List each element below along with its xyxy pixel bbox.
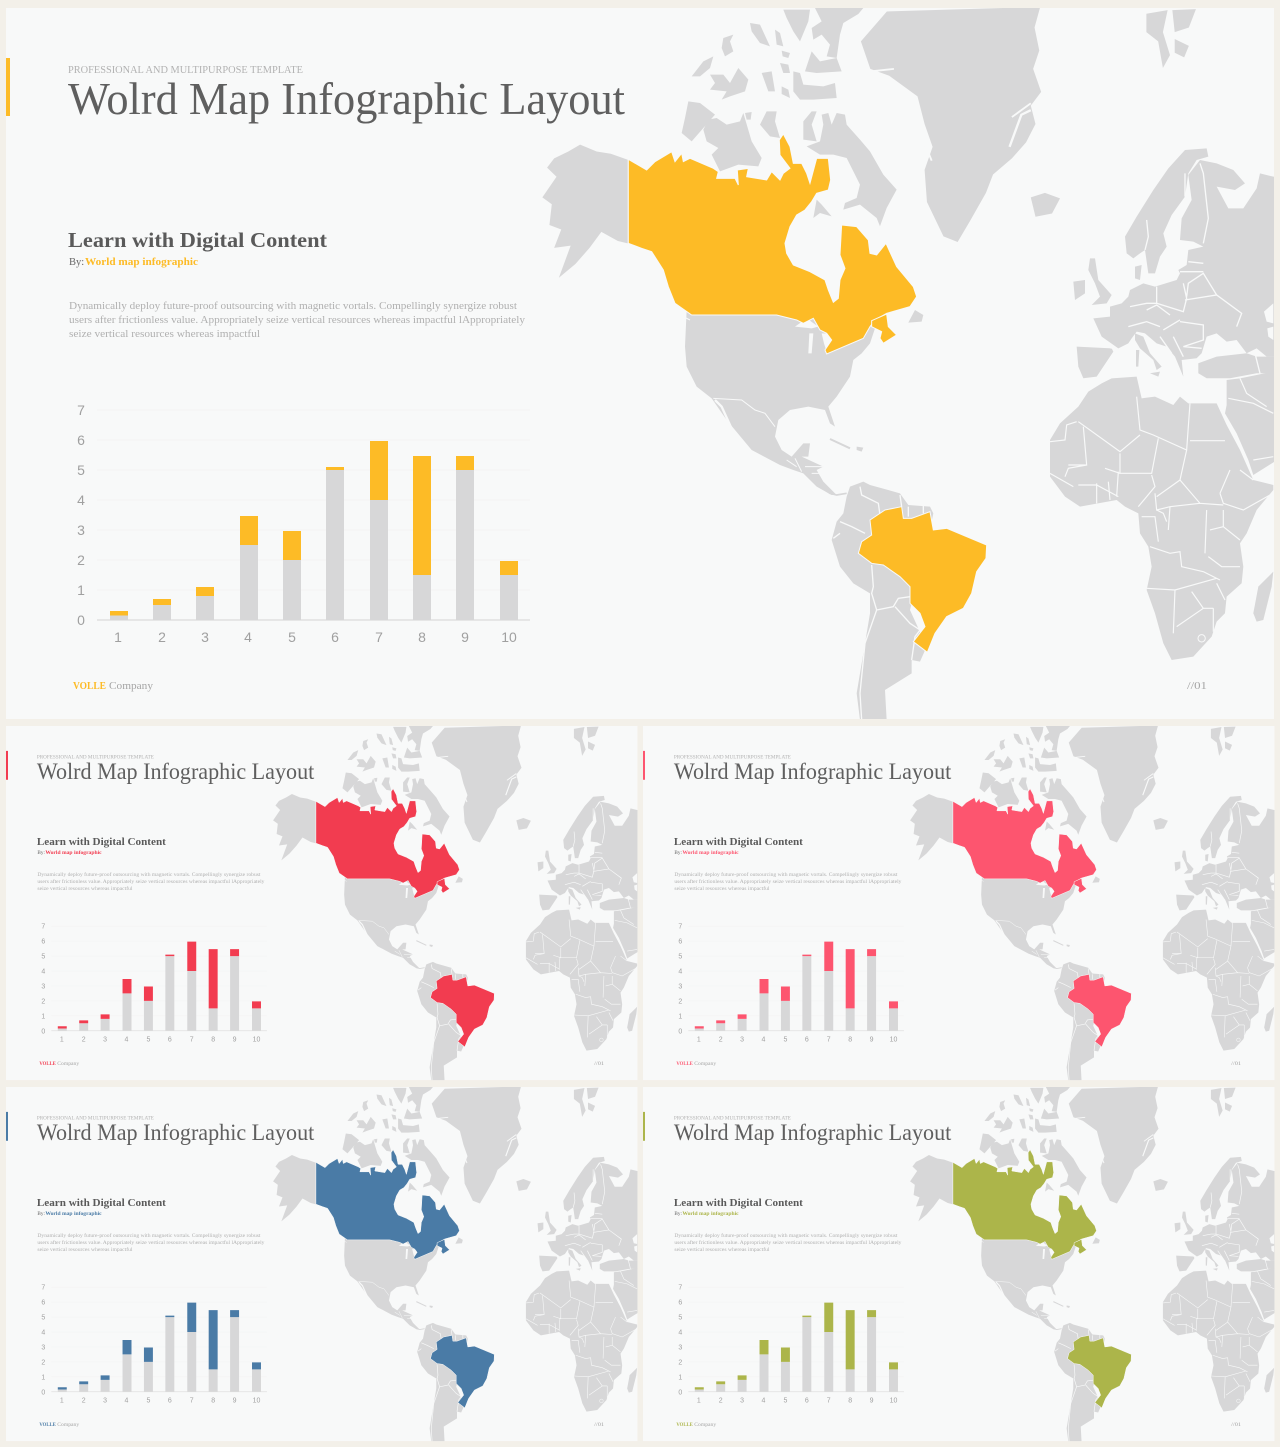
stacked bar chart: 4	[125, 1037, 129, 1044]
stacked bar chart: 7	[375, 629, 383, 645]
stacked bar chart: 9	[870, 1037, 874, 1044]
world map	[273, 725, 644, 1081]
page number: //01	[594, 1422, 604, 1428]
stacked bar chart: 5	[288, 629, 296, 645]
stacked bar chart: 4	[678, 1330, 682, 1337]
body text	[69, 300, 526, 340]
accent bar	[643, 1112, 645, 1141]
stacked bar chart: 8	[211, 1037, 215, 1044]
stacked bar chart: 5	[146, 1037, 150, 1044]
eyebrow label: PROFESSIONAL AND MULTIPURPOSE TEMPLATE	[37, 1115, 154, 1121]
title: Wolrd Map Infographic Layout	[68, 73, 625, 124]
stacked bar chart: 0	[678, 1389, 682, 1396]
stacked bar chart: 4	[762, 1398, 766, 1405]
footer brand: Company	[57, 1061, 79, 1067]
accent bar	[6, 58, 10, 116]
body text: Dynamically deploy future-proof outsourcing with magnetic vortals. Compellingly synergize robust	[37, 1232, 261, 1239]
stacked bar chart: 3	[77, 522, 85, 538]
panel: blue	[6, 1086, 644, 1442]
stacked bar chart: 7	[77, 402, 85, 418]
stacked bar chart: 2	[82, 1398, 86, 1405]
body text: Dynamically deploy future-proof outsourcing with magnetic vortals. Compellingly synergize robust	[69, 300, 517, 312]
stacked bar chart: 1	[697, 1037, 701, 1044]
footer brand: Company	[694, 1422, 716, 1428]
stacked bar chart: 6	[41, 939, 45, 946]
stacked bar chart: 1	[41, 1013, 45, 1020]
stacked bar chart: 10	[253, 1037, 260, 1044]
panel: red	[6, 725, 644, 1081]
stacked bar chart: 7	[678, 924, 682, 931]
panel: green	[643, 1086, 1280, 1442]
byline: By:	[37, 850, 45, 856]
world map	[273, 1086, 644, 1442]
byline: By:	[37, 1211, 45, 1217]
stacked bar chart: 0	[41, 1028, 45, 1035]
body text: users after frictionless value. Appropriately seize vertical resources whereas impactful lAppropriately	[69, 314, 526, 326]
byline: By:	[69, 257, 84, 268]
footer brand	[39, 1061, 79, 1067]
stacked bar chart: 5	[783, 1037, 787, 1044]
accent bar	[6, 1112, 8, 1141]
world map	[910, 1086, 1280, 1442]
stacked bar chart: 10	[890, 1037, 897, 1044]
byline: World map infographic	[682, 850, 739, 856]
panel: main yellow	[6, 7, 1280, 720]
stacked bar chart: 9	[233, 1398, 237, 1405]
stacked bar chart: 1	[678, 1013, 682, 1020]
footer brand	[676, 1061, 716, 1067]
stacked bar chart: 9	[461, 629, 469, 645]
stacked bar chart: 5	[146, 1398, 150, 1405]
stacked bar chart: 5	[41, 1315, 45, 1322]
stacked bar chart: 2	[719, 1398, 723, 1405]
page number: //01	[594, 1061, 604, 1067]
footer brand	[73, 680, 154, 692]
eyebrow label: PROFESSIONAL AND MULTIPURPOSE TEMPLATE	[37, 754, 154, 760]
stacked bar chart: 7	[190, 1037, 194, 1044]
stacked bar chart: 1	[77, 582, 85, 598]
footer brand	[676, 1422, 716, 1428]
accent bar	[643, 751, 645, 780]
stacked bar chart: 3	[201, 629, 209, 645]
title: Wolrd Map Infographic Layout	[37, 759, 315, 784]
stacked bar chart: 3	[103, 1037, 107, 1044]
stacked bar chart: 4	[244, 629, 252, 645]
stacked bar chart: 0	[41, 1389, 45, 1396]
stacked bar chart: 3	[678, 983, 682, 990]
body text	[37, 1232, 265, 1253]
stacked bar chart: 1	[114, 629, 122, 645]
byline: By:	[674, 1211, 682, 1217]
stacked bar chart: 3	[740, 1398, 744, 1405]
stacked bar chart: 7	[41, 1285, 45, 1292]
stacked bar chart: 1	[60, 1037, 64, 1044]
stacked bar chart: 7	[827, 1037, 831, 1044]
stacked bar chart	[41, 1285, 267, 1405]
stacked bar chart: 8	[848, 1398, 852, 1405]
stacked bar chart: 6	[678, 939, 682, 946]
body text: seize vertical resources whereas impactful	[674, 1246, 770, 1253]
footer brand: VOLLE	[73, 680, 106, 692]
body text: users after frictionless value. Appropriately seize vertical resources whereas impactful lAppropriately	[674, 1239, 902, 1246]
stacked bar chart: 6	[331, 629, 339, 645]
stacked bar chart: 7	[678, 1285, 682, 1292]
stacked bar chart: 2	[678, 998, 682, 1005]
accent bar	[6, 751, 8, 780]
stacked bar chart	[41, 924, 267, 1044]
body text: seize vertical resources whereas impactful	[69, 328, 260, 340]
body text: seize vertical resources whereas impactful	[37, 1246, 133, 1253]
stacked bar chart: 8	[211, 1398, 215, 1405]
stacked bar chart: 2	[41, 1359, 45, 1366]
eyebrow label: PROFESSIONAL AND MULTIPURPOSE TEMPLATE	[674, 1115, 791, 1121]
stacked bar chart: 8	[848, 1037, 852, 1044]
stacked bar chart: 4	[77, 492, 85, 508]
stacked bar chart: 4	[41, 1330, 45, 1337]
body text: Dynamically deploy future-proof outsourcing with magnetic vortals. Compellingly synergize robust	[674, 1232, 898, 1239]
footer brand: Company	[694, 1061, 716, 1067]
stacked bar chart: 3	[103, 1398, 107, 1405]
world map	[910, 725, 1280, 1081]
eyebrow label: PROFESSIONAL AND MULTIPURPOSE TEMPLATE	[68, 65, 303, 76]
stacked bar chart: 10	[501, 629, 517, 645]
footer brand	[39, 1422, 79, 1428]
world map	[542, 7, 1280, 720]
stacked bar chart: 3	[678, 1344, 682, 1351]
stacked bar chart: 6	[77, 432, 85, 448]
stacked bar chart: 7	[827, 1398, 831, 1405]
body text: seize vertical resources whereas impactful	[674, 885, 770, 892]
stacked bar chart: 5	[41, 954, 45, 961]
body text: seize vertical resources whereas impactful	[37, 885, 133, 892]
footer brand: VOLLE	[39, 1061, 56, 1067]
stacked bar chart: 10	[890, 1398, 897, 1405]
byline: By:	[674, 850, 682, 856]
heading: Learn with Digital Content	[37, 1198, 166, 1209]
stacked bar chart: 2	[82, 1037, 86, 1044]
heading: Learn with Digital Content	[674, 837, 803, 848]
stacked bar chart: 6	[168, 1037, 172, 1044]
stacked bar chart: 2	[41, 998, 45, 1005]
stacked bar chart: 5	[678, 954, 682, 961]
footer brand: Company	[57, 1422, 79, 1428]
stacked bar chart: 1	[697, 1398, 701, 1405]
body text: Dynamically deploy future-proof outsourcing with magnetic vortals. Compellingly synergize robust	[37, 871, 261, 878]
footer brand: VOLLE	[39, 1422, 56, 1428]
stacked bar chart: 4	[125, 1398, 129, 1405]
heading: Learn with Digital Content	[68, 228, 327, 252]
stacked bar chart: 9	[870, 1398, 874, 1405]
title: Wolrd Map Infographic Layout	[37, 1120, 315, 1145]
footer brand: VOLLE	[676, 1422, 693, 1428]
body text	[37, 871, 265, 892]
stacked bar chart	[678, 1285, 904, 1405]
body text: users after frictionless value. Appropriately seize vertical resources whereas impactful lAppropriately	[674, 878, 902, 885]
byline: World map infographic	[45, 850, 102, 856]
page number: //01	[1187, 680, 1207, 692]
stacked bar chart: 7	[41, 924, 45, 931]
stacked bar chart: 5	[678, 1315, 682, 1322]
footer brand: Company	[109, 680, 154, 692]
stacked bar chart: 6	[41, 1300, 45, 1307]
body text: users after frictionless value. Appropriately seize vertical resources whereas impactful lAppropriately	[37, 1239, 265, 1246]
stacked bar chart: 7	[190, 1398, 194, 1405]
stacked bar chart: 3	[740, 1037, 744, 1044]
stacked bar chart: 8	[418, 629, 426, 645]
stacked bar chart: 2	[77, 552, 85, 568]
stacked bar chart: 5	[783, 1398, 787, 1405]
stacked bar chart	[77, 402, 530, 645]
body text	[674, 1232, 902, 1253]
stacked bar chart: 2	[719, 1037, 723, 1044]
stacked bar chart: 3	[41, 1344, 45, 1351]
body text: users after frictionless value. Appropriately seize vertical resources whereas impactful lAppropriately	[37, 878, 265, 885]
heading: Learn with Digital Content	[674, 1198, 803, 1209]
stacked bar chart: 4	[678, 969, 682, 976]
panel: pink	[643, 725, 1280, 1081]
stacked bar chart: 1	[60, 1398, 64, 1405]
stacked bar chart: 2	[158, 629, 166, 645]
stacked bar chart: 9	[233, 1037, 237, 1044]
page number: //01	[1231, 1422, 1241, 1428]
title: Wolrd Map Infographic Layout	[674, 759, 952, 784]
title: Wolrd Map Infographic Layout	[674, 1120, 952, 1145]
stacked bar chart	[678, 924, 904, 1044]
stacked bar chart: 1	[41, 1374, 45, 1381]
body text	[674, 871, 902, 892]
stacked bar chart: 5	[77, 462, 85, 478]
page number: //01	[1231, 1061, 1241, 1067]
stacked bar chart: 4	[41, 969, 45, 976]
stacked bar chart: 1	[678, 1374, 682, 1381]
stacked bar chart: 2	[678, 1359, 682, 1366]
byline: World map infographic	[45, 1211, 102, 1217]
stacked bar chart: 6	[805, 1037, 809, 1044]
stacked bar chart: 3	[41, 983, 45, 990]
byline: World map infographic	[682, 1211, 739, 1217]
stacked bar chart: 6	[805, 1398, 809, 1405]
stacked bar chart: 6	[678, 1300, 682, 1307]
stacked bar chart: 4	[762, 1037, 766, 1044]
eyebrow label: PROFESSIONAL AND MULTIPURPOSE TEMPLATE	[674, 754, 791, 760]
stacked bar chart: 10	[253, 1398, 260, 1405]
body text: Dynamically deploy future-proof outsourcing with magnetic vortals. Compellingly synergize robust	[674, 871, 898, 878]
heading: Learn with Digital Content	[37, 837, 166, 848]
stacked bar chart: 6	[168, 1398, 172, 1405]
stacked bar chart: 0	[77, 612, 85, 628]
stacked bar chart: 0	[678, 1028, 682, 1035]
byline: World map infographic	[85, 257, 198, 268]
footer brand: VOLLE	[676, 1061, 693, 1067]
